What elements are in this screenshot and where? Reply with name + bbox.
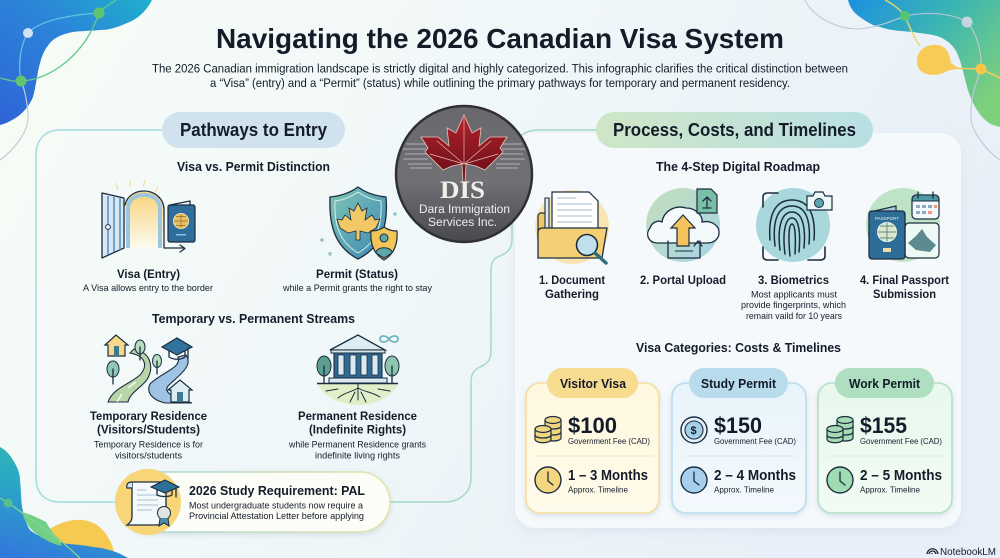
decoration: top-left network blob: [0, 0, 152, 160]
label: permanent residence: [288, 409, 426, 460]
card: work permit: Work Permit: [849, 377, 921, 391]
label: temporary residence: (Visitors/Students): [97, 422, 200, 436]
callout: 2026 study requirement: [115, 469, 390, 535]
card: visitor visa: Approx. Timeline: [568, 484, 628, 494]
title: Navigating the 2026 Canadian Visa System: [216, 23, 784, 54]
section heading: process costs and timelines: [596, 112, 873, 148]
icon: clock: [681, 467, 707, 493]
label: temporary residence: visitors/students: [115, 450, 182, 460]
label: temporary residence: [90, 409, 207, 460]
icon: institution with roots: [317, 335, 399, 405]
step 4 label: 4. Final Passport: [860, 273, 949, 287]
card: study permit: 2 – 4 Months: [714, 467, 796, 484]
label: permanent residence: Permanent Residence: [298, 409, 417, 423]
icon: clock: [535, 467, 561, 493]
label: permanent residence: indefinite living rights: [315, 450, 400, 460]
logo: Dara Immigration Services: Dara Immigration: [419, 204, 510, 216]
card: work permit: $155: [860, 413, 907, 438]
step 3 label: remain vaild for 10 years: [746, 311, 842, 321]
label: visa entry: [83, 267, 213, 293]
decoration: bottom-left blob: [0, 447, 128, 558]
icon: passport, calendar, map: PASSPORT: [875, 216, 899, 221]
panel: process background: [515, 133, 961, 528]
step 3 label: Most applicants must: [751, 290, 837, 300]
step 2 label: 2. Portal Upload: [640, 273, 726, 287]
label: permanent residence: while Permanent Residence grants: [288, 440, 426, 450]
sub-heading: visa vs permit: Visa vs. Permit Distinction: [177, 159, 330, 174]
callout: 2026 study requirement: Provincial Attestation Letter before applying: [189, 511, 364, 521]
logo: Dara Immigration Services: [396, 106, 532, 242]
step 1 label: Gathering: [545, 287, 599, 301]
step labels: [539, 273, 949, 321]
step 1 label: [539, 273, 605, 301]
card: study permit: $150: [714, 413, 762, 438]
icon: dollar coin: [681, 417, 707, 443]
card: visitor visa: [526, 368, 659, 513]
card: study permit: Government Fee (CAD): [714, 436, 796, 446]
callout: 2026 study requirement: 2026 Study Requirement: PAL: [189, 484, 365, 498]
icon: fingerprint biometrics: [756, 188, 832, 262]
logo: Dara Immigration Services: Services Inc.: [428, 217, 497, 229]
section heading: process costs and timelines: Process, Costs, and Timelines: [613, 120, 856, 140]
card: work permit: [818, 368, 952, 513]
sub-heading: digital roadmap: The 4-Step Digital Roadmap: [656, 159, 820, 174]
icon: coin stacks: [827, 416, 853, 443]
connector line: [385, 130, 600, 502]
card: study permit: [672, 368, 806, 513]
step 3 label: [741, 273, 846, 321]
label: temporary residence: Temporary Residence is for: [94, 440, 203, 450]
label: permit status: while a Permit grants the right to stay: [282, 283, 432, 293]
icon: coin stacks: [535, 416, 561, 443]
step 4 label: [860, 273, 949, 301]
icon: passport, calendar, map: [866, 188, 940, 262]
label: temporary residence: Temporary Residence: [90, 409, 207, 423]
section heading: pathways to entry: [162, 112, 345, 148]
step 3 label: 3. Biometrics: [758, 273, 829, 287]
label: permit status: Permit (Status): [316, 267, 398, 281]
sub-heading: visa categories: Visa Categories: Costs & Timelines: [636, 340, 841, 355]
card: work permit: Government Fee (CAD): [860, 436, 942, 446]
card: work permit: Approx. Timeline: [860, 484, 920, 494]
label: visa entry: A Visa allows entry to the border: [83, 283, 213, 293]
step 1 label: 1. Document: [539, 273, 605, 287]
step 4 label: Submission: [873, 287, 936, 301]
watermark: NotebookLM: NotebookLM: [940, 546, 996, 558]
icon: two roads with houses and cap: [105, 335, 192, 403]
intro text: a “Visa” (entry) and a “Permit” (status) while outlining the primary pathways for temporary and permanent residency.: [210, 76, 790, 90]
panel outline: pathways frame: [36, 130, 165, 502]
intro text: [152, 62, 848, 90]
card: visitor visa: Visitor Visa: [560, 377, 627, 391]
card: study permit: Study Permit: [701, 377, 777, 391]
logo: Dara Immigration Services: DIS: [440, 177, 485, 204]
label: permanent residence: (Indefinite Rights): [309, 422, 406, 436]
card: study permit: Approx. Timeline: [714, 484, 774, 494]
label: visa entry: Visa (Entry): [117, 267, 180, 281]
callout: 2026 study requirement: Most undergraduate students now require a: [189, 500, 364, 510]
card: visitor visa: $100: [568, 413, 617, 438]
sub-heading: temporary vs permanent: Temporary vs. Permanent Streams: [152, 311, 355, 326]
decoration: top-right network blob: [805, 0, 1000, 160]
icon: clock: [827, 467, 853, 493]
icon: scroll with cap and seal: [127, 480, 179, 526]
step 3 label: provide fingerprints, which: [741, 300, 846, 310]
icon: cloud upload: [646, 188, 720, 262]
card: work permit: 2 – 5 Months: [860, 467, 942, 484]
label: permit status: [282, 267, 432, 293]
icon: document folder: [535, 190, 609, 264]
icon: shield with maple leaf: [320, 187, 397, 260]
intro text: The 2026 Canadian immigration landscape is strictly digital and highly categorized. This infographic clarifies the critical distinction between: [152, 62, 848, 76]
card: visitor visa: 1 – 3 Months: [568, 467, 648, 484]
icon: open door and passport: [102, 180, 195, 258]
icon: dollar coin: $: [690, 425, 697, 437]
card: visitor visa: Government Fee (CAD): [568, 436, 650, 446]
section heading: pathways to entry: Pathways to Entry: [180, 120, 327, 140]
